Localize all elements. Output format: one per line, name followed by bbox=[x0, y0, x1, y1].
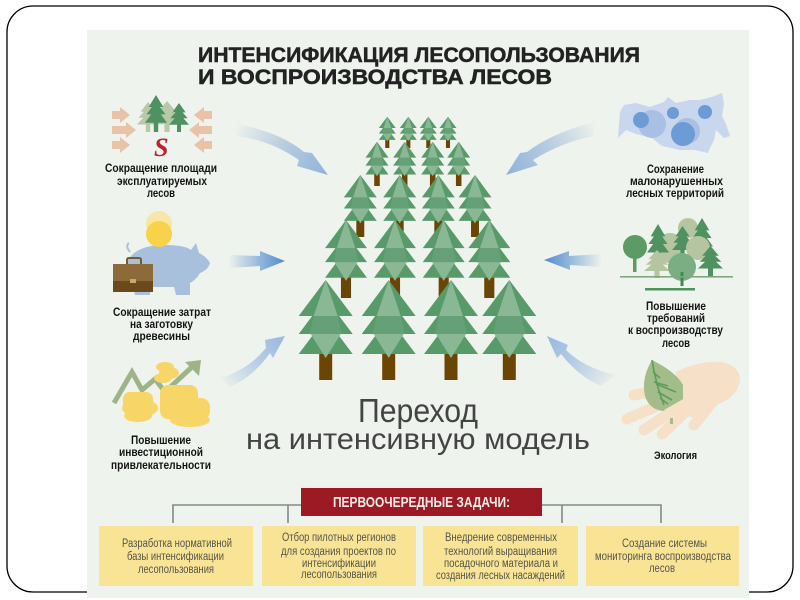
caption: stricter reforestation requirements bbox=[628, 299, 723, 350]
caption: preserving intact forests: малонарушенных bbox=[630, 174, 723, 188]
caption: preserving intact forests: Сохранение bbox=[647, 162, 704, 176]
icon: hands holding a leaf bbox=[627, 360, 740, 434]
arrow: middle left bbox=[229, 251, 285, 271]
caption: stricter reforestation requirements: требований bbox=[647, 311, 705, 325]
caption: reducing costs bbox=[113, 305, 211, 343]
banner: priority tasks: ПЕРВООЧЕРЕДНЫЕ ЗАДАЧИ: bbox=[333, 494, 510, 511]
caption: reducing area: эксплуатируемых bbox=[117, 174, 207, 188]
central forest: rows of trees growing in size bbox=[299, 117, 536, 380]
panel: task 2: лесопользования bbox=[301, 569, 377, 581]
panel: task 4: мониторинга воспроизводства bbox=[595, 551, 731, 563]
icon: mixed forest bbox=[620, 218, 733, 290]
panel: task 4 bbox=[586, 526, 739, 586]
panel: task 2: Отбор пилотных регионов bbox=[282, 532, 396, 544]
panel: task 3: технологий выращивания bbox=[444, 546, 557, 558]
panel: task 3: Внедрение современных bbox=[445, 532, 557, 544]
icon: shrinking forest area bbox=[112, 95, 212, 162]
caption: preserving intact forests bbox=[626, 162, 724, 200]
panel: task 3: создания лесных насаждений bbox=[436, 570, 565, 582]
icon: map of Russia with circles bbox=[618, 93, 730, 153]
caption: ecology: Экология bbox=[654, 450, 697, 462]
panel: task 2: для создания проектов по bbox=[281, 546, 396, 558]
caption: stricter reforestation requirements: лесов bbox=[662, 336, 690, 350]
title: И ВОСПРОИЗВОДСТВА ЛЕСОВ bbox=[198, 66, 552, 89]
connector lines bbox=[173, 505, 661, 523]
panel: task 1: Разработка нормативной bbox=[122, 538, 232, 550]
title bbox=[198, 44, 640, 89]
arrow: bottom left bbox=[220, 336, 285, 387]
caption: preserving intact forests: лесных территорий bbox=[626, 186, 724, 200]
caption: stricter reforestation requirements: к воспроизводству bbox=[628, 323, 723, 337]
panel: task 4: Создание системы bbox=[622, 538, 707, 550]
panel: task 1 bbox=[99, 526, 253, 586]
arrow: top left bbox=[237, 124, 328, 175]
heading: transition to intensive model: на интенсивную модель bbox=[246, 423, 590, 456]
title: ИНТЕНСИФИКАЦИЯ ЛЕСОПОЛЬЗОВАНИЯ bbox=[198, 44, 640, 67]
caption: stricter reforestation requirements: Повышение bbox=[646, 299, 706, 313]
caption: reducing area: Сокращение площади bbox=[105, 161, 217, 175]
panel: task 4: лесов bbox=[649, 563, 675, 575]
panel: infographic background bbox=[87, 30, 749, 598]
icon: coins and rising chart bbox=[114, 360, 210, 427]
panel: task 1: лесопользования bbox=[138, 564, 214, 576]
arrow: bottom right bbox=[547, 336, 616, 386]
caption: reducing costs: древесины bbox=[133, 329, 190, 343]
banner: priority tasks bbox=[301, 488, 542, 516]
caption: investment appeal: Повышение bbox=[131, 433, 191, 447]
icon: piggy bank with coin and briefcase bbox=[113, 211, 210, 295]
caption: investment appeal bbox=[111, 433, 211, 472]
heading: transition to intensive model: Переход bbox=[358, 392, 478, 429]
panel: task 3: посадочного материала и bbox=[444, 558, 558, 570]
caption: reducing area bbox=[105, 161, 217, 200]
caption: reducing costs: на заготовку bbox=[130, 317, 193, 331]
panel: task 3 bbox=[423, 526, 578, 586]
panel: task 1: базы интенсификации bbox=[127, 551, 224, 563]
heading: transition to intensive model bbox=[246, 392, 590, 456]
caption: reducing costs: Сокращение затрат bbox=[113, 305, 211, 319]
panel: task 2 bbox=[262, 526, 416, 586]
panel: task 2: интенсификации bbox=[302, 558, 376, 570]
arrow: middle right bbox=[544, 251, 601, 270]
arrow: top right bbox=[506, 122, 594, 175]
icon: shrinking forest area: S bbox=[154, 133, 168, 162]
caption: investment appeal: инвестиционной bbox=[119, 445, 203, 459]
caption: investment appeal: привлекательности bbox=[111, 458, 211, 472]
caption: reducing area: лесов bbox=[147, 186, 175, 200]
